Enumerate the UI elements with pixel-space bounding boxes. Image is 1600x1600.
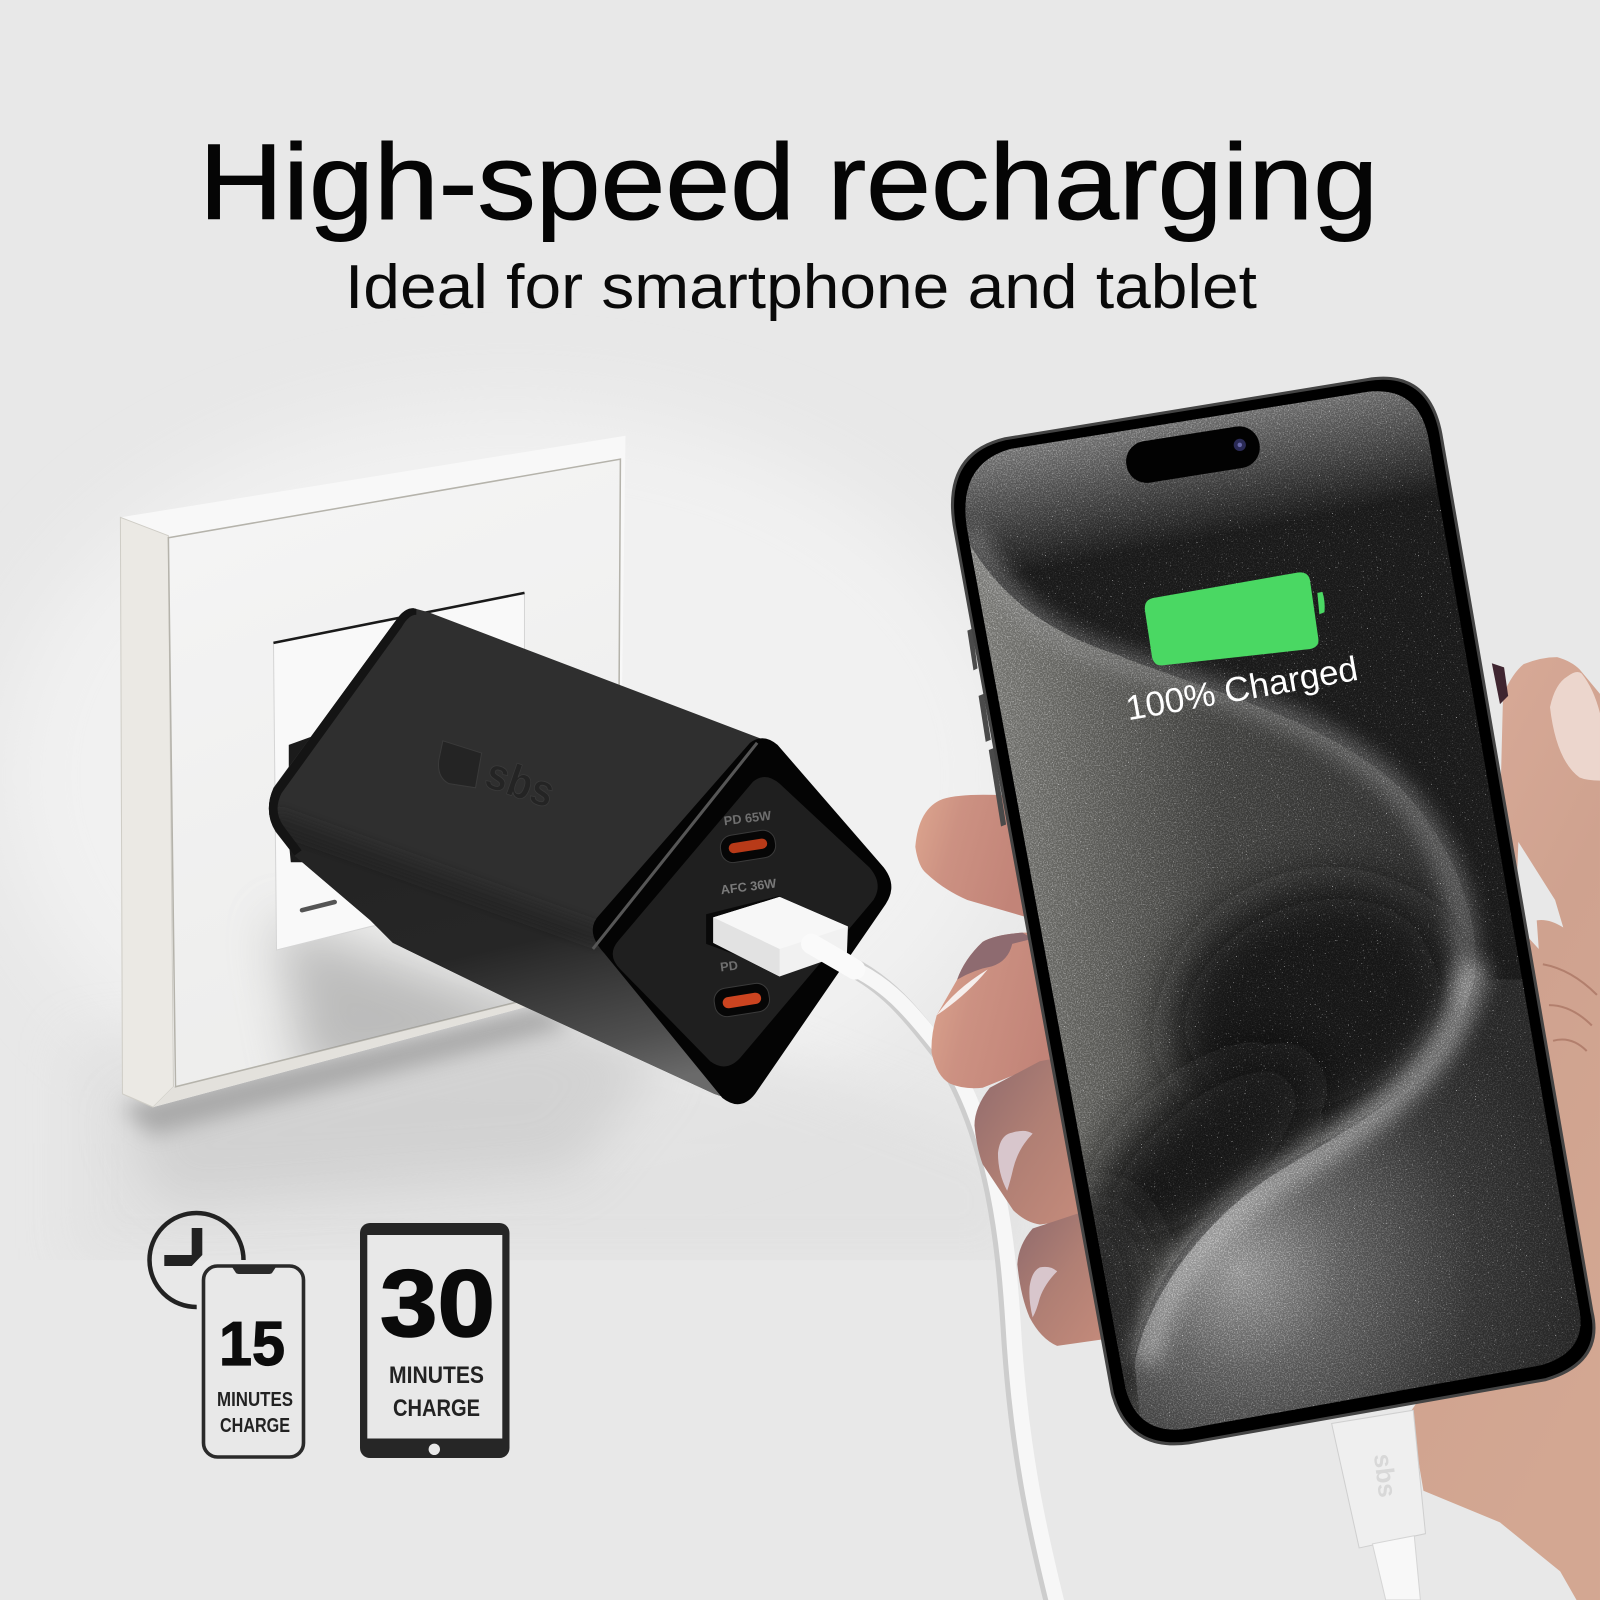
USB cable [713,897,1059,1600]
text: minutes: MINUTES [217,1389,293,1411]
battery status text: 100% Charged [1123,650,1361,728]
title: High-speed recharging [199,121,1378,242]
wall socket plate [120,436,626,1107]
finger: index [915,795,1031,918]
text: 30: 30 [380,1251,495,1357]
USB-C connector [1332,1410,1425,1600]
wallpaper screen [966,391,1580,1430]
socket centre [273,593,524,950]
phone body [952,378,1594,1444]
port: PD [712,957,771,1018]
text: 15: 15 [219,1310,285,1379]
home button [429,1444,440,1455]
port: PD 65W [719,808,777,864]
middle fingernail [937,969,988,1015]
front face [593,738,891,1104]
back finger creases [1543,964,1597,1051]
charger body [268,608,760,1096]
outer frame [120,436,626,1107]
matte inner panel [613,777,878,1066]
text: charge: CHARGE [220,1415,290,1437]
hand holding phone [915,657,1600,1600]
thumb nail [1550,672,1600,781]
USB-C connector: sbs [1368,1452,1401,1499]
plum phone band [1492,663,1508,704]
logo emboss [438,741,562,818]
tablet body [360,1223,510,1458]
dynamic island [1123,423,1263,486]
battery icon [1145,572,1325,665]
port: PD: PD [719,957,739,974]
port: AFC 36W: AFC 36W [720,875,778,897]
charger [255,592,891,1122]
rim at the wall end [273,610,416,853]
side buttons [967,629,1006,827]
charger shadow on plate [260,916,515,1060]
icon: phone outline [204,1266,304,1457]
body top face [268,608,760,1096]
icon: clock [150,1213,244,1307]
text: minutes: MINUTES [389,1362,484,1389]
product photo scene [0,367,1600,1600]
finger: ring [974,1056,1082,1224]
port: PD 65W: PD 65W [723,808,773,828]
gap between thumb and back fingers [1515,842,1563,949]
icon: tablet 30 minutes charge [360,1223,510,1458]
screen stars [966,392,1580,1429]
inner plate [168,459,620,1087]
finger: middle [931,933,1061,1088]
soft fold [270,821,275,830]
tablet screen [367,1235,502,1438]
subtitle: Ideal for smartphone and tablet [345,253,1257,322]
icon: phone 15 minutes charge [150,1213,304,1457]
palm and thumb mass [1410,657,1600,1600]
text: charge: CHARGE [393,1395,480,1422]
wall [60,476,961,1234]
logo emboss: sbs [479,747,562,818]
cable neck [811,944,855,969]
screen grain [966,391,1580,1430]
USB plug [713,897,848,977]
middle knuckle shade [957,933,1033,980]
smartphone [939,367,1600,1459]
body lower face [292,836,721,1096]
port: AFC 36W [706,875,806,969]
finger: little [1017,1212,1107,1346]
